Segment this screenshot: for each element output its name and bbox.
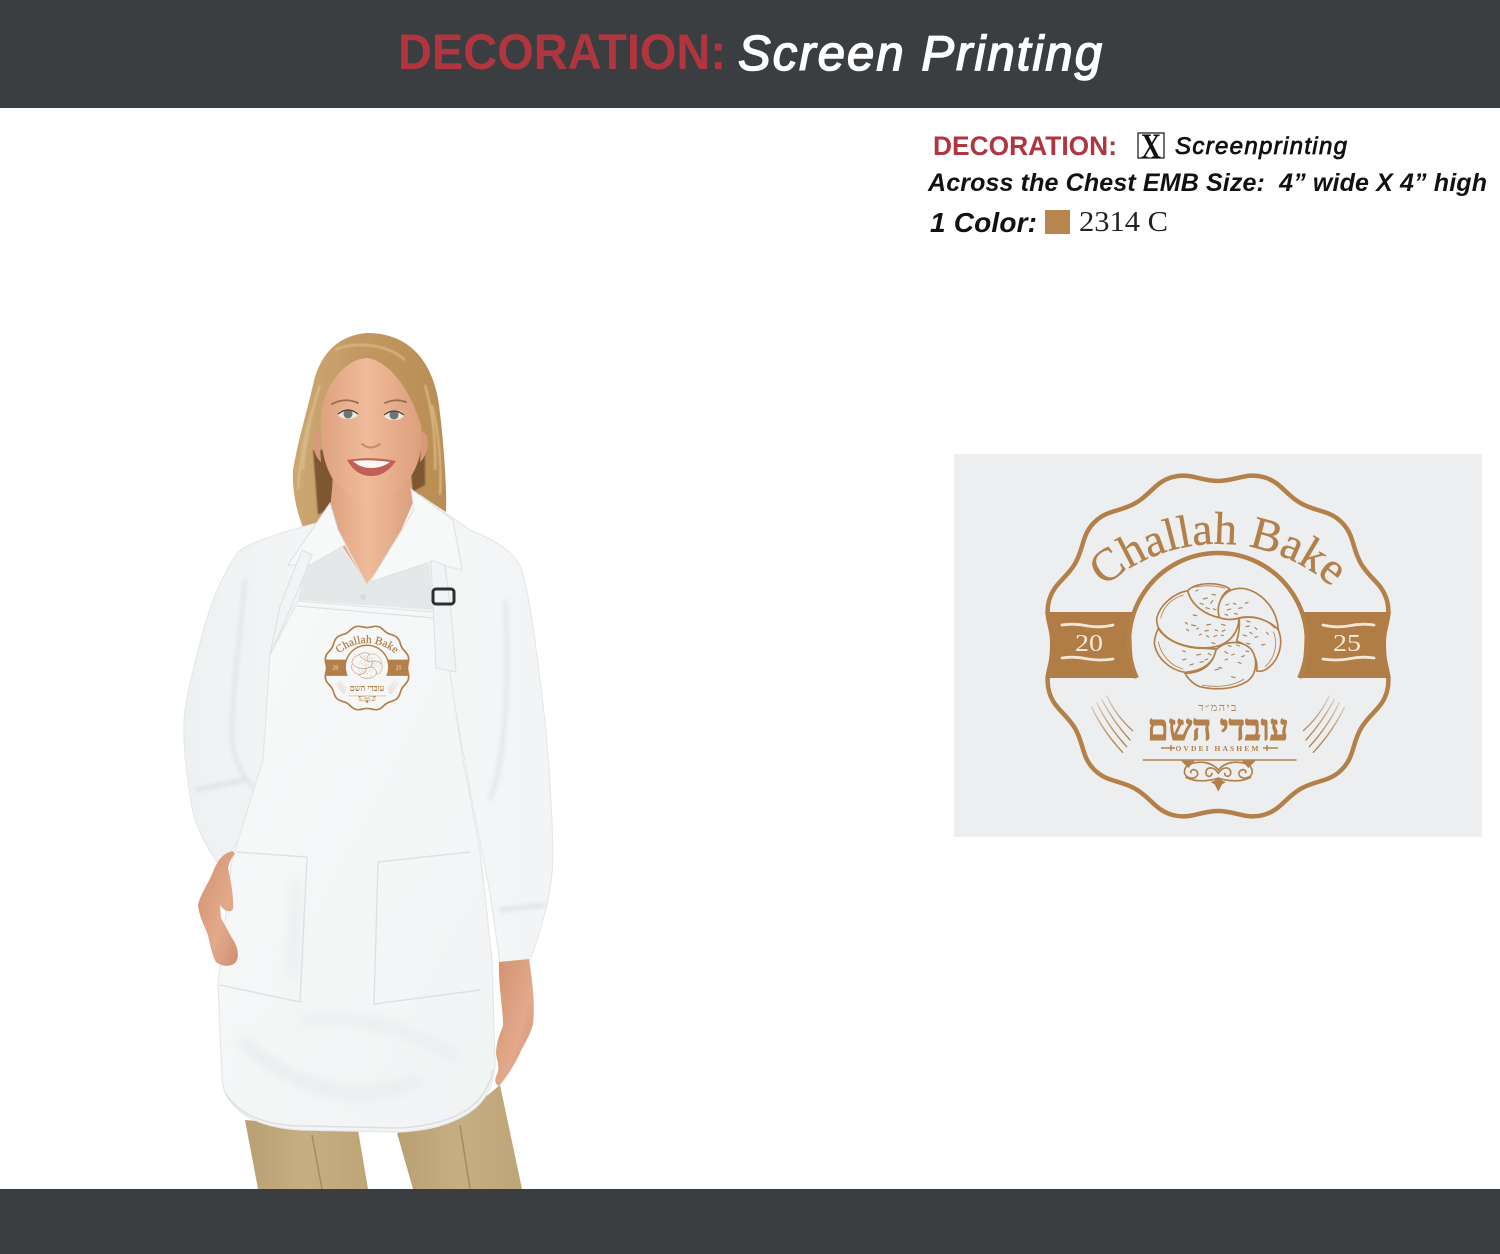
specification text block (927, 126, 1487, 238)
right wheat stalks (1303, 696, 1344, 752)
curved title: Challah Bake (1092, 512, 1342, 585)
small printed logo on apron: 20 (332, 665, 338, 671)
screenprinting label: Screenprinting (1175, 133, 1348, 160)
nose (362, 444, 380, 448)
shirt (184, 495, 553, 963)
strap buckle (433, 589, 454, 604)
small printed logo on apron (324, 626, 410, 710)
apron bib hem (297, 606, 434, 618)
small printed logo on apron: Challah Bake (336, 635, 398, 654)
pants (245, 1085, 522, 1189)
right ribbon (1301, 612, 1391, 678)
left ribbon: 20 (1075, 631, 1103, 657)
shirt sleeve shading (195, 580, 545, 910)
left hand (198, 851, 238, 966)
neck and chest skin (330, 470, 414, 584)
right ribbon: 25 (1333, 631, 1361, 657)
inner arch (1129, 553, 1307, 678)
eyes (338, 409, 404, 420)
english name: OVDEI HASHEM (1176, 744, 1260, 753)
dark hair under jaw (313, 445, 425, 515)
ornament divider (1143, 760, 1296, 792)
eyebrows (332, 400, 406, 404)
inner shirt placket (298, 545, 433, 610)
decoration label: DECORATION: (933, 131, 1117, 161)
small hebrew line: ביהמ״ד (1198, 702, 1238, 714)
smile (347, 458, 396, 476)
ears (313, 432, 428, 462)
wavy badge outline (1048, 476, 1388, 816)
face (321, 358, 422, 501)
hair back (293, 333, 446, 530)
left ribbon (1045, 612, 1135, 678)
pantone code: 2314 C (1079, 206, 1168, 238)
header bar (0, 0, 1500, 108)
colour swatch (1045, 210, 1070, 234)
colour label: 1 Color: (930, 207, 1037, 238)
left neck strap (270, 550, 312, 655)
right hand (495, 959, 534, 1086)
title (398, 24, 1102, 81)
right neck strap (431, 560, 456, 672)
small printed logo on apron: עובדי השם (350, 683, 384, 693)
title: DECORATION: (398, 24, 726, 80)
shirt button (360, 594, 366, 600)
size line: Across the Chest EMB Size: 4” wide X 4” high (927, 169, 1487, 197)
logo panel (954, 454, 1482, 837)
right pocket (374, 852, 480, 1004)
small printed logo on apron: 25 (396, 665, 402, 671)
collar (288, 489, 462, 585)
challah bread illustration (1154, 584, 1281, 689)
left wheat stalks (1092, 696, 1133, 752)
hair streaks (298, 345, 441, 495)
checkbox with X: X (1141, 126, 1161, 166)
model wearing apron (183, 333, 554, 1189)
apron (218, 601, 495, 1132)
apron bottom hem (225, 1070, 493, 1128)
large challah bake logo (1045, 473, 1391, 819)
footer bar (0, 1189, 1500, 1254)
apron fold shading (240, 880, 460, 1093)
hebrew name: עובדי השם (1148, 708, 1288, 748)
left pocket (220, 852, 307, 1002)
title: Screen Printing (738, 27, 1102, 81)
